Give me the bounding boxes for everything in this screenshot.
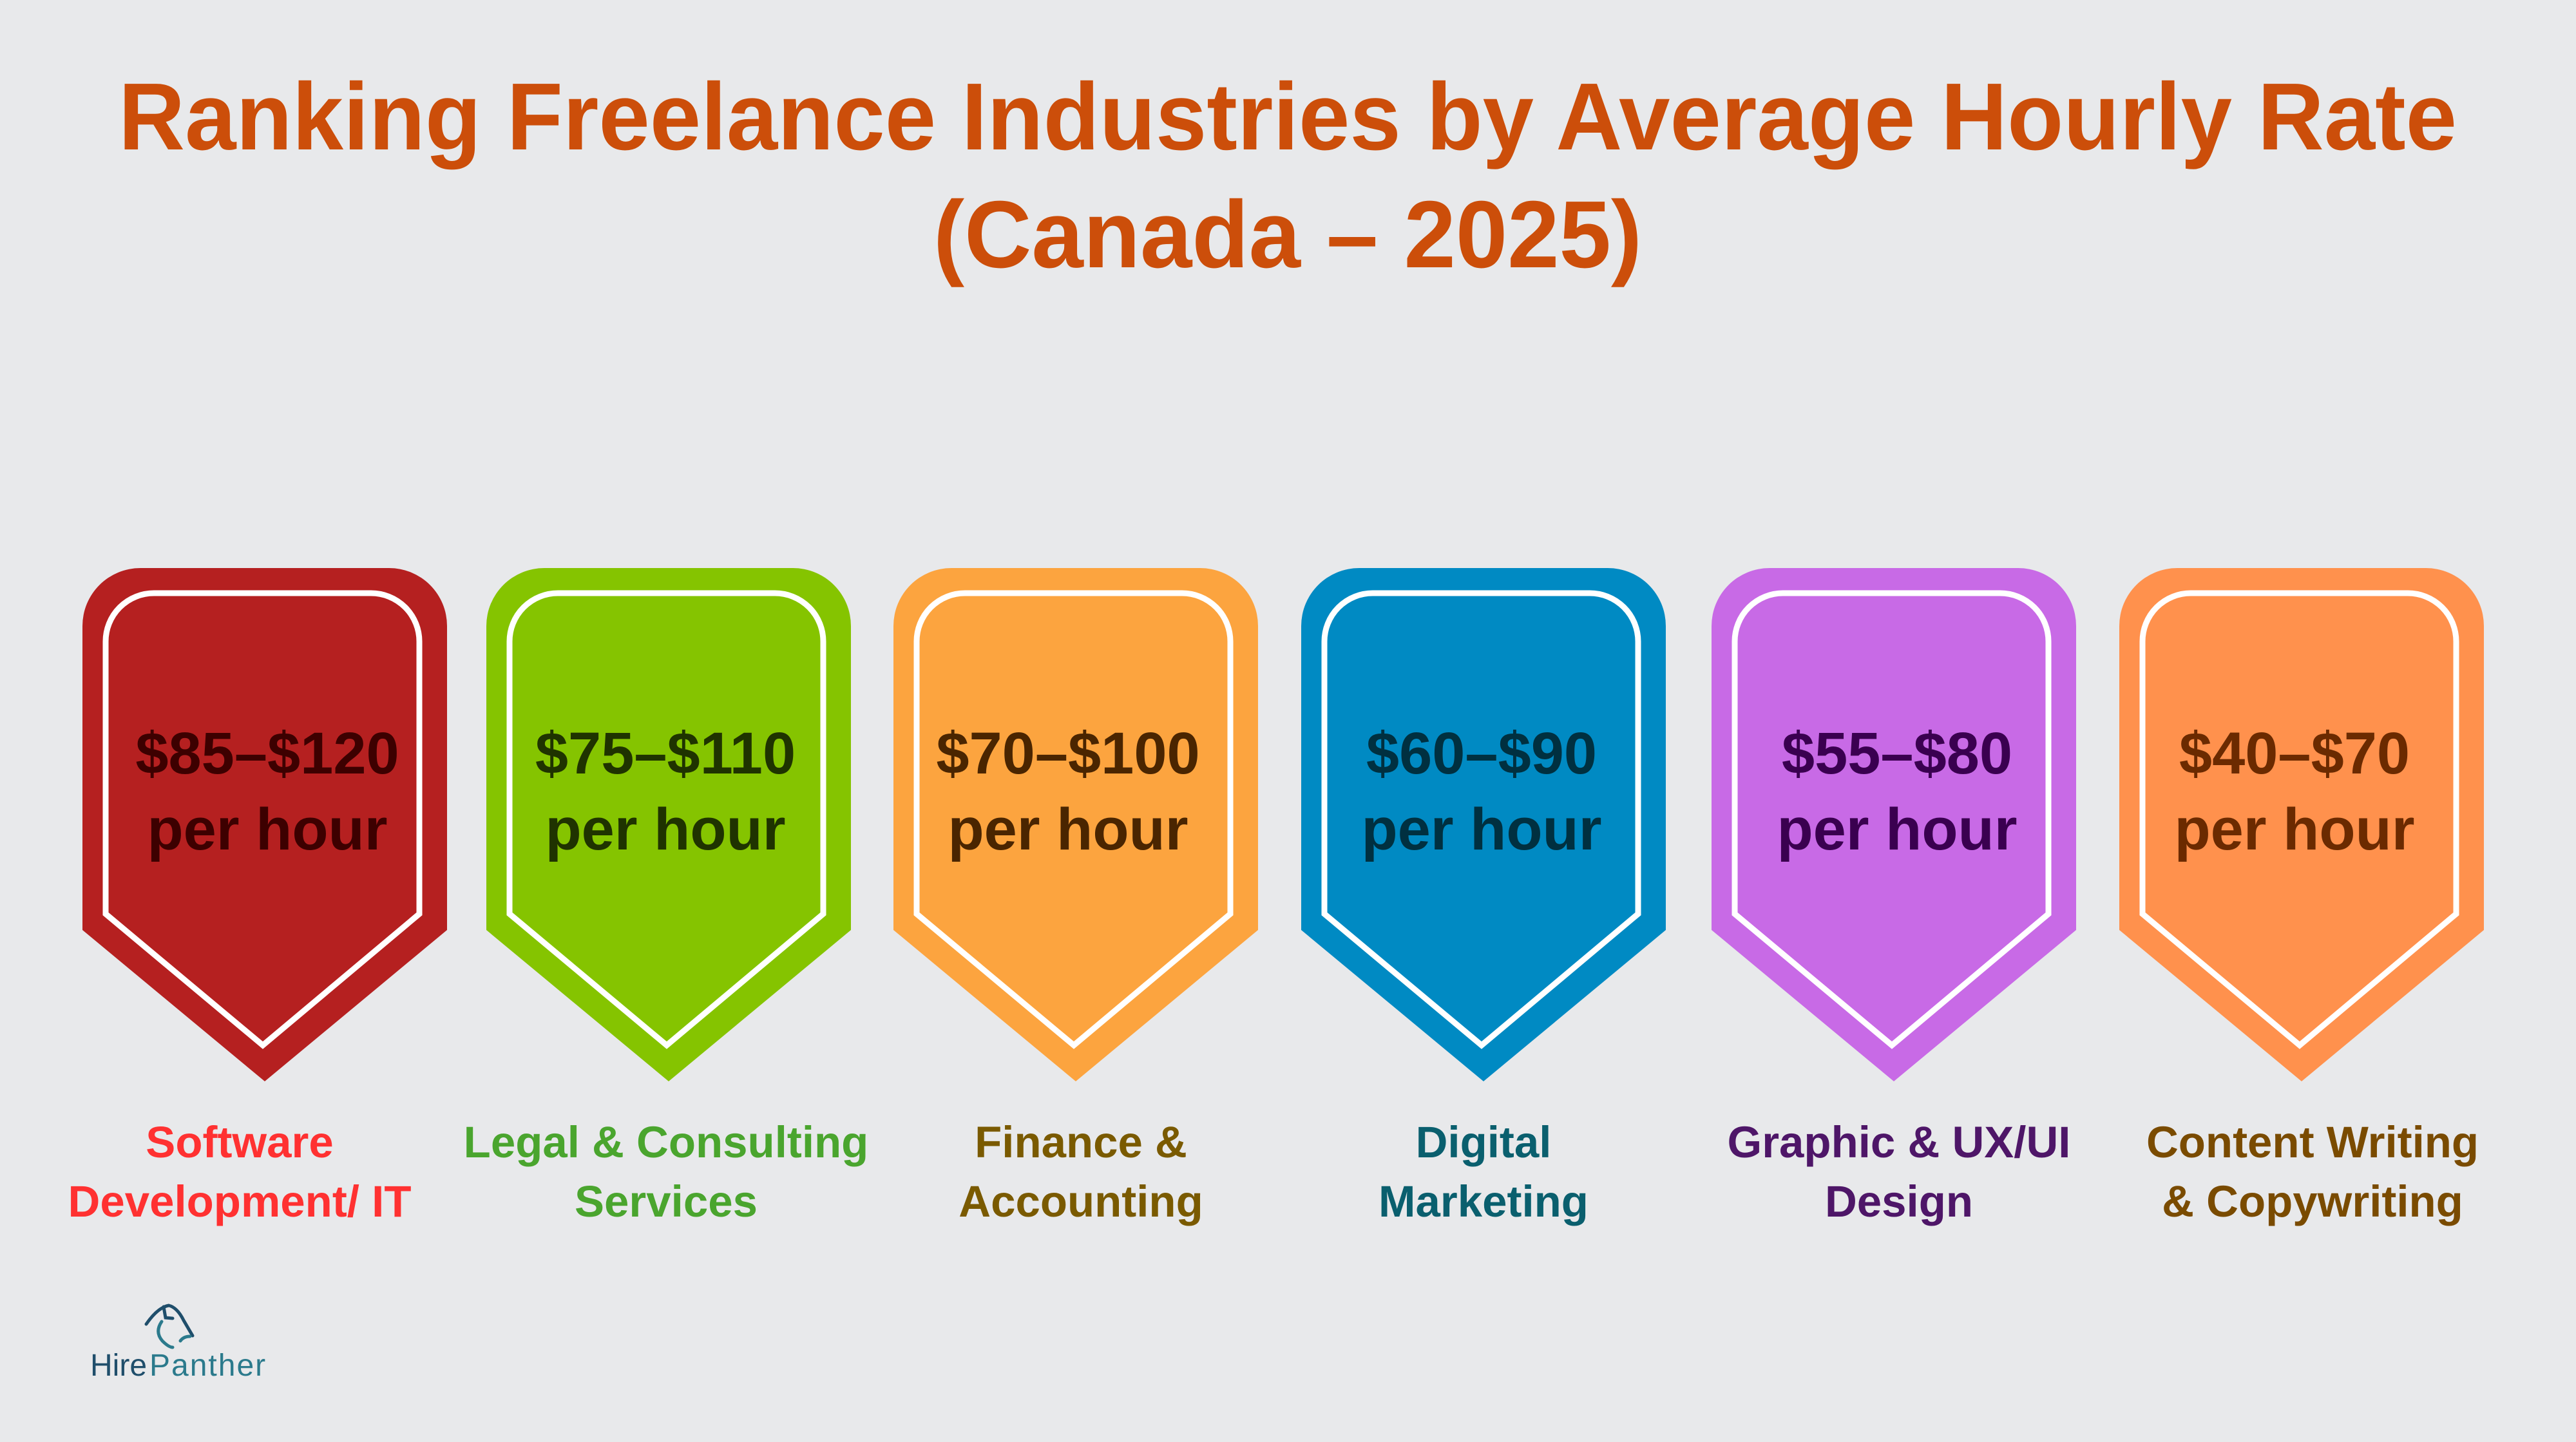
label: software development: Software (146, 1117, 334, 1167)
title: (Canada – 2025) (933, 182, 1642, 288)
label: digital marketing (1379, 1117, 1589, 1226)
logo: HirePanther: Hire (90, 1349, 147, 1383)
badge: content writing: $40–$70 (2179, 721, 2410, 786)
badge: digital marketing (1301, 568, 1666, 1081)
badge: legal & consulting: $75–$110 (535, 721, 796, 786)
label: finance & accounting (959, 1117, 1203, 1226)
title (119, 64, 2457, 288)
badge: finance & accounting: $70–$100 (936, 721, 1200, 786)
badge: software development (82, 568, 447, 1081)
label: digital marketing: Digital (1416, 1117, 1551, 1167)
badge: content writing (2119, 568, 2484, 1081)
label: content writing: & Copywriting (2162, 1177, 2463, 1226)
badge: digital marketing: per hour (1361, 797, 1602, 862)
label: graphic design: Graphic & UX/UI (1728, 1117, 2070, 1167)
badge: software development: per hour (147, 797, 388, 862)
badge: finance & accounting (893, 568, 1258, 1081)
badge: content writing: per hour (2174, 797, 2415, 862)
logo: HirePanther (90, 1305, 267, 1383)
label: legal & consulting: Services (575, 1177, 758, 1226)
icon: panther head (146, 1305, 193, 1347)
badge: legal & consulting (486, 568, 851, 1081)
label: software development: Development/ IT (68, 1177, 411, 1226)
label: finance & accounting: Accounting (959, 1177, 1203, 1226)
badge: software development: $85–$120 (135, 721, 399, 786)
badge: graphic & ux/ui design: $55–$80 (1782, 721, 2012, 786)
title: Ranking Freelance Industries by Average Hourly Rate (119, 64, 2457, 170)
badge: finance & accounting: per hour (948, 797, 1188, 862)
label: finance & accounting: Finance & (975, 1117, 1187, 1167)
badge: graphic & ux/ui design: per hour (1777, 797, 2018, 862)
label: software development (68, 1117, 411, 1226)
label: content writing (2146, 1117, 2479, 1226)
label: legal & consulting (464, 1117, 868, 1226)
badge: digital marketing: $60–$90 (1366, 721, 1597, 786)
label: legal & consulting: Legal & Consulting (464, 1117, 868, 1167)
label: content writing: Content Writing (2146, 1117, 2479, 1167)
logo: HirePanther: Panther (149, 1349, 267, 1383)
badge: graphic & ux/ui design (1712, 568, 2076, 1081)
label: graphic design: Design (1825, 1177, 1973, 1226)
label: digital marketing: Marketing (1379, 1177, 1589, 1226)
label: graphic design (1728, 1117, 2070, 1226)
badge: legal & consulting: per hour (545, 797, 786, 862)
